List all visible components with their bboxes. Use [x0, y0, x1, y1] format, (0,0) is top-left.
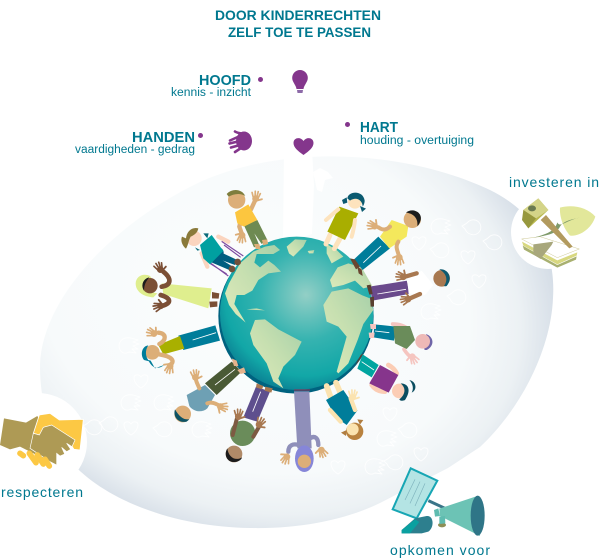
child: green shirt pink skin: [369, 324, 432, 366]
child: dark green trousers: [174, 358, 246, 422]
white child silhouette: [283, 150, 333, 238]
child: purple trousers green shirt: [226, 383, 273, 462]
icon: light bulb: [292, 70, 308, 93]
icon: hammer, plant and money: [522, 198, 595, 268]
connector dots: [198, 77, 350, 138]
title: DOOR KINDERRECHTEN: [215, 8, 381, 23]
label: hoofd: [171, 72, 252, 99]
icon: heart: [294, 138, 314, 155]
child: lavender trousers and hijab: [278, 390, 328, 472]
label: hoofd: kennis - inzicht: [171, 87, 252, 99]
label: investeren in: investeren in: [509, 174, 599, 190]
label: hart: houding - overtuiging: [360, 135, 474, 147]
icon: handshake: [0, 413, 83, 466]
white halos behind corner icons: [0, 195, 585, 491]
child: olive shirt teal trousers: [142, 325, 220, 374]
child: girl with crutches: [181, 228, 243, 276]
child: olive dress girl: [326, 193, 366, 249]
title: [215, 8, 381, 40]
child: white shirt man: [367, 269, 450, 307]
label: hart: HART: [360, 119, 398, 136]
globe: [218, 237, 374, 394]
child: yellow shirt man with teal trousers: [350, 210, 421, 276]
label: respecteren: respecteren: [1, 484, 83, 500]
child: purple shirt girl: [355, 353, 415, 401]
title: ZELF TOE TE PASSEN: [228, 25, 371, 40]
child: yellow shirt boy: [227, 190, 268, 249]
child: woman with headscarf: [136, 260, 219, 312]
label: hoofd: HOOFD: [199, 72, 251, 89]
label: handen: HANDEN: [132, 129, 195, 146]
icon: megaphone and sign: [393, 468, 485, 536]
label: handen: vaardigheden - gedrag: [75, 144, 195, 156]
child: blue dress girl: [326, 383, 363, 440]
label: hart: [360, 119, 474, 147]
label: opkomen voor: opkomen voor: [390, 542, 490, 558]
background blob: [40, 156, 553, 528]
icon: hand: [230, 132, 252, 152]
faint outline icons: [83, 219, 502, 474]
label: handen: [75, 129, 195, 156]
continents: [225, 239, 373, 388]
